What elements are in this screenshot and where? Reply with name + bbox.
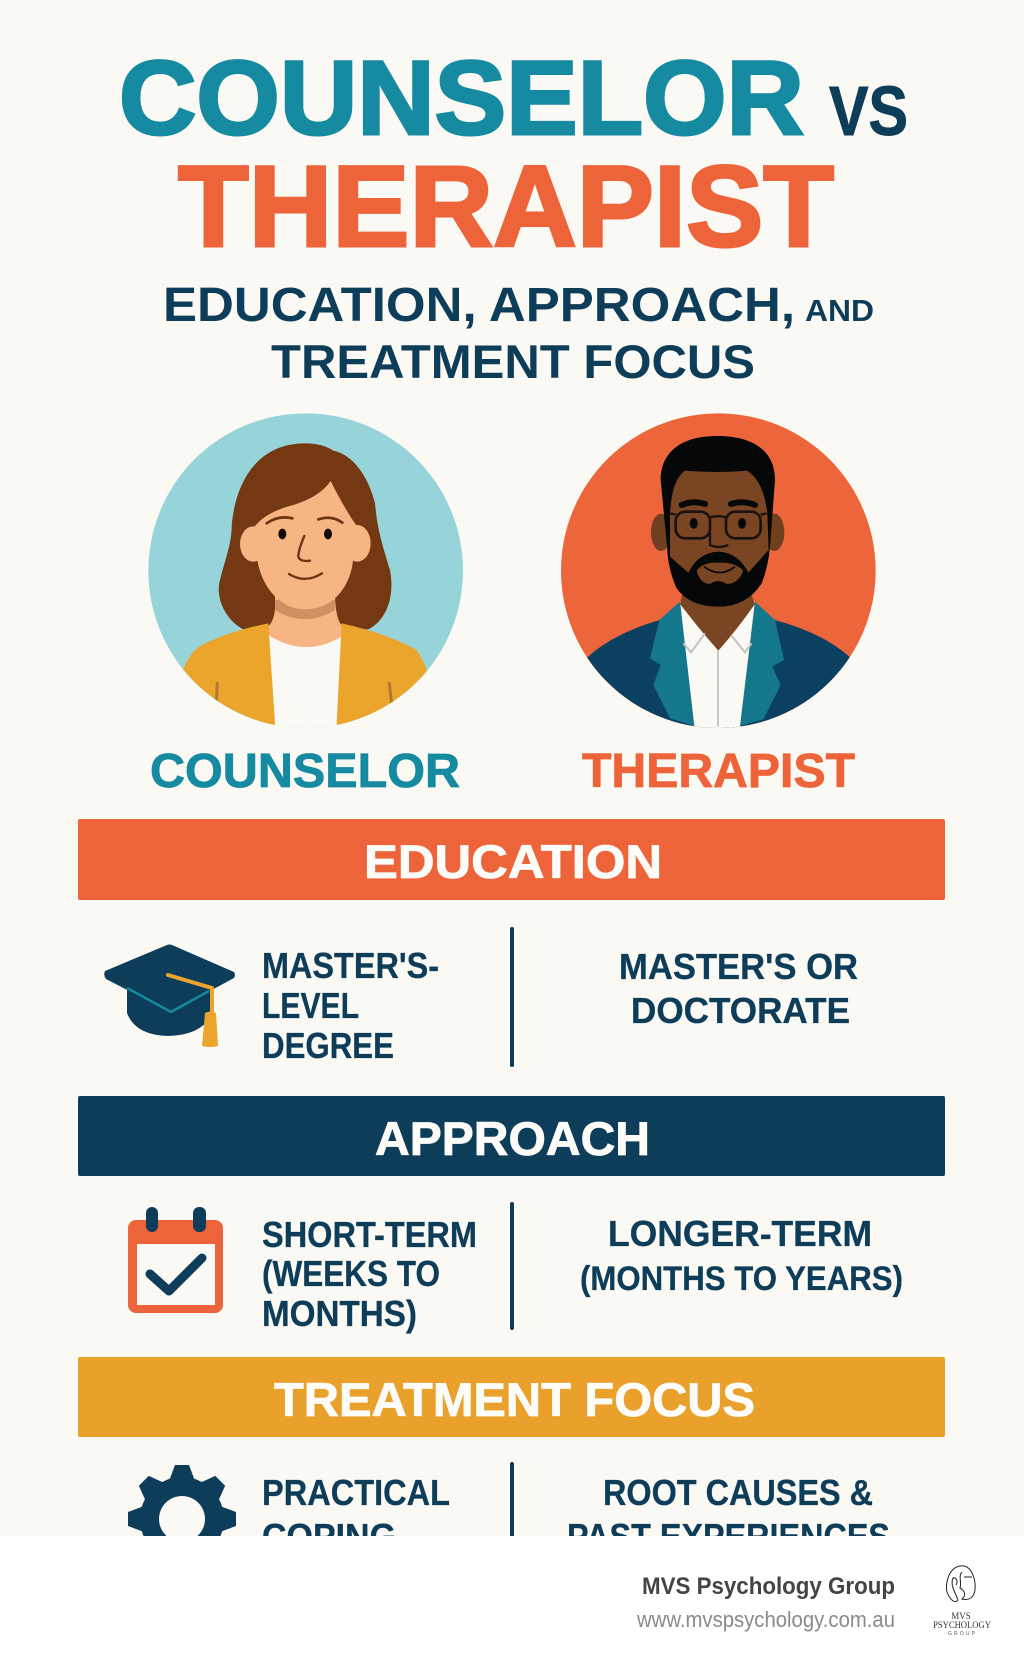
treatment: counselor text (262, 1472, 450, 1557)
footer: logo: PSYCHOLOGY (933, 1620, 991, 1630)
footer: brand name: MVS Psychology Group (642, 1573, 895, 1600)
subtitle (163, 279, 874, 388)
footer: logo: MVS (951, 1611, 971, 1621)
footer: logo (933, 1566, 991, 1637)
approach: counselor text (262, 1214, 477, 1334)
education: therapist text: MASTER'S OR (619, 946, 858, 987)
subtitle line one: EDUCATION, APPROACH, (163, 279, 795, 332)
treatment: therapist text: PAST EXPERIENCES (567, 1516, 890, 1557)
education: divider (510, 927, 514, 1067)
education: counselor text: LEVEL (262, 985, 359, 1026)
treatment: divider (510, 1462, 514, 1542)
approach: counselor text: (WEEKS TO (262, 1253, 440, 1294)
approach: counselor text: SHORT-TERM (262, 1214, 477, 1255)
treatment: counselor text: COPING (262, 1516, 396, 1557)
title (119, 40, 908, 271)
label: therapist: THERAPIST (582, 745, 855, 798)
approach: therapist text: LONGER-TERM (608, 1213, 872, 1254)
subtitle line two: TREATMENT FOCUS (271, 335, 755, 388)
icon: calendar (128, 1207, 223, 1313)
section header: approach: APPROACH (375, 1112, 650, 1165)
icon: gear (128, 1465, 236, 1573)
title word: counselor: COUNSELOR (119, 40, 804, 157)
icon: graduation cap (104, 944, 235, 1047)
subtitle small word: and: AND (805, 293, 874, 328)
section header: education (78, 819, 945, 900)
section header: treatment focus: TREATMENT FOCUS (274, 1373, 755, 1426)
treatment: counselor text: PRACTICAL (262, 1472, 450, 1513)
title word: therapist: THERAPIST (178, 143, 834, 271)
education: counselor text: DEGREE (262, 1025, 394, 1066)
footer (0, 1536, 1024, 1666)
approach: therapist text: (MONTHS TO YEARS) (580, 1260, 903, 1298)
title word: vs: VS (829, 72, 908, 150)
education: counselor text: MASTER'S- (262, 945, 439, 986)
treatment: therapist text: ROOT CAUSES & (603, 1472, 873, 1513)
education: counselor text (262, 945, 439, 1066)
portrait: therapist (561, 413, 876, 733)
section header: education: EDUCATION (364, 835, 662, 888)
approach: counselor text: MONTHS) (262, 1293, 417, 1334)
footer: logo: GROUP (948, 1631, 976, 1637)
education: therapist text: DOCTORATE (631, 990, 850, 1031)
approach: therapist text (580, 1213, 903, 1298)
label: counselor: COUNSELOR (150, 745, 460, 798)
footer: website: www.mvspsychology.com.au (636, 1607, 895, 1632)
education: therapist text (619, 946, 858, 1031)
approach: divider (510, 1202, 514, 1330)
section header: treatment focus (78, 1357, 945, 1437)
treatment: therapist text (567, 1472, 890, 1557)
portrait: counselor (148, 413, 463, 733)
section header: approach (78, 1096, 945, 1176)
